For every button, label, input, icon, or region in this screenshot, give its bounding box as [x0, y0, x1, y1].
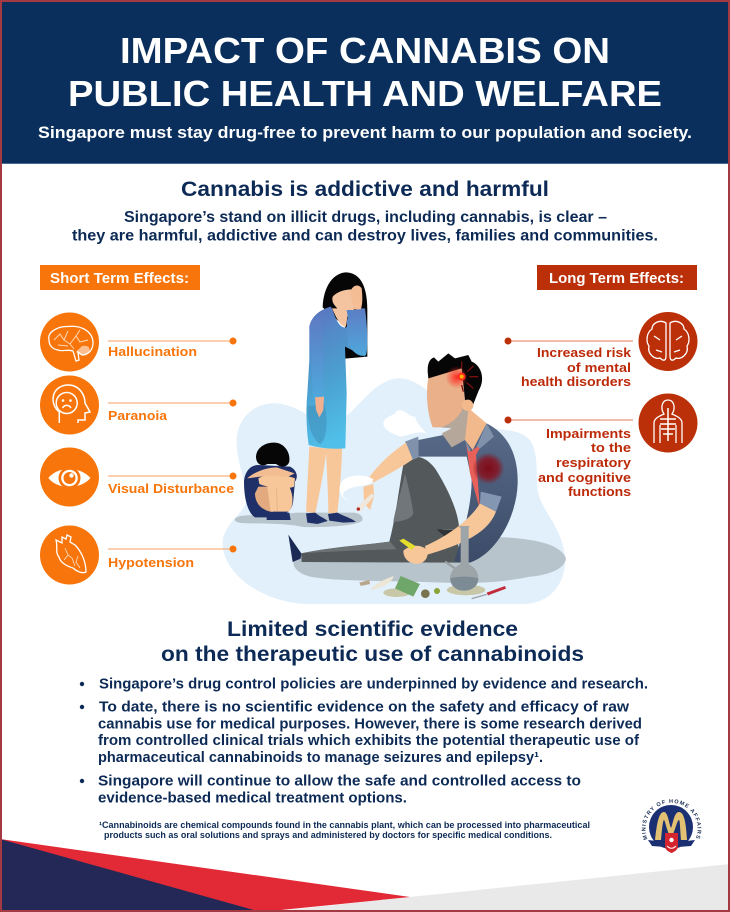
seated man [288, 353, 518, 564]
title: PUBLIC HEALTH AND WELFARE [68, 73, 662, 114]
panel: short term heading: Short Term Effects: [50, 271, 189, 287]
footer: navy wedge [0, 839, 261, 912]
child [244, 443, 297, 520]
bullet list: cannabis use for medical purposes. However, there is some research derived [98, 716, 642, 732]
heading: limited scientific evidence: Limited scientific evidence [227, 617, 518, 641]
long term: respiratory and cognitive: Impairments [546, 426, 631, 441]
illustration: family affected by cannabis [223, 272, 566, 604]
icon: eye [40, 448, 99, 506]
long term: respiratory and cognitive: functions [568, 484, 631, 499]
short term: hypotension [40, 526, 236, 584]
long term: respiratory and cognitive [504, 394, 698, 499]
long term: respiratory and cognitive: to the [591, 440, 631, 455]
bullet list: from controlled clinical trials which exhibits the potential therapeutic use of [98, 733, 639, 749]
logo: Ministry of Home Affairs: MINISTRY OF HOME AFFAIRS [642, 799, 702, 840]
heading: addictive and harmful: Cannabis is addictive and harmful [181, 177, 549, 201]
icon: brain [40, 312, 99, 372]
bullet list [80, 676, 648, 806]
subtitle: Singapore must stay drug-free to prevent harm to our population and society. [38, 123, 692, 142]
intro text: Singapore’s stand on illicit drugs, including cannabis, is clear – [124, 209, 607, 226]
icon: heart [40, 526, 99, 584]
long term: respiratory and cognitive: respiratory [556, 455, 632, 470]
panel: short term heading [40, 265, 200, 290]
intro text: they are harmful, addictive and can destroy lives, families and communities. [72, 228, 658, 244]
ground shadows [235, 513, 566, 583]
header banner [0, 0, 730, 164]
icon: respiratory system [638, 394, 698, 452]
bullet list: pharmaceutical cannabinoids to manage seizures and epilepsy¹. [98, 750, 543, 766]
short term: visual disturbance [40, 448, 236, 506]
footer: grey wedge [270, 864, 730, 912]
footnote: ¹Cannabinoids are chemical compounds found in the cannabis plant, which can be processed into pharmaceutical [99, 820, 590, 830]
icon: sad head [40, 376, 99, 434]
heading: limited scientific evidence: on the therapeutic use of cannabinoids [161, 642, 584, 666]
bong and paraphernalia [359, 526, 506, 599]
background blob [223, 378, 565, 604]
footnote [99, 820, 590, 840]
heading: limited scientific evidence [161, 617, 584, 666]
long term: mental health: Increased risk [537, 345, 632, 360]
long term: respiratory and cognitive: and cognitive [538, 470, 631, 485]
footer: red wedge [0, 839, 410, 912]
bullet list: evidence-based medical treatment options. [98, 790, 407, 806]
short term: visual disturbance: Visual Disturbance [108, 481, 234, 496]
footnote: products such as oral solutions and sprays and administered by doctors for specific medical conditions. [104, 830, 552, 840]
panel: long term heading [537, 265, 697, 290]
title: IMPACT OF CANNABIS ON [120, 30, 610, 71]
woman [306, 272, 367, 524]
bullet list: Singapore’s drug control policies are underpinned by evidence and research. [99, 676, 648, 692]
short term: hypotension: Hypotension [108, 555, 194, 570]
panel: long term heading: Long Term Effects: [549, 271, 684, 287]
long term: mental health: of mental [567, 360, 631, 375]
short term: paranoia: Paranoia [108, 408, 168, 423]
bullet list: To date, there is no scientific evidence on the safety and efficacy of raw [99, 700, 630, 716]
long term: mental health [504, 312, 698, 389]
title [68, 30, 662, 114]
short term: hallucination: Hallucination [108, 344, 197, 359]
long term: mental health: health disorders [521, 374, 631, 389]
bullet list: Singapore will continue to allow the safe and controlled access to [98, 774, 581, 790]
short term: paranoia [40, 376, 236, 434]
short term: hallucination [40, 312, 236, 372]
intro text [72, 209, 658, 244]
icon: brain halves [638, 312, 698, 371]
